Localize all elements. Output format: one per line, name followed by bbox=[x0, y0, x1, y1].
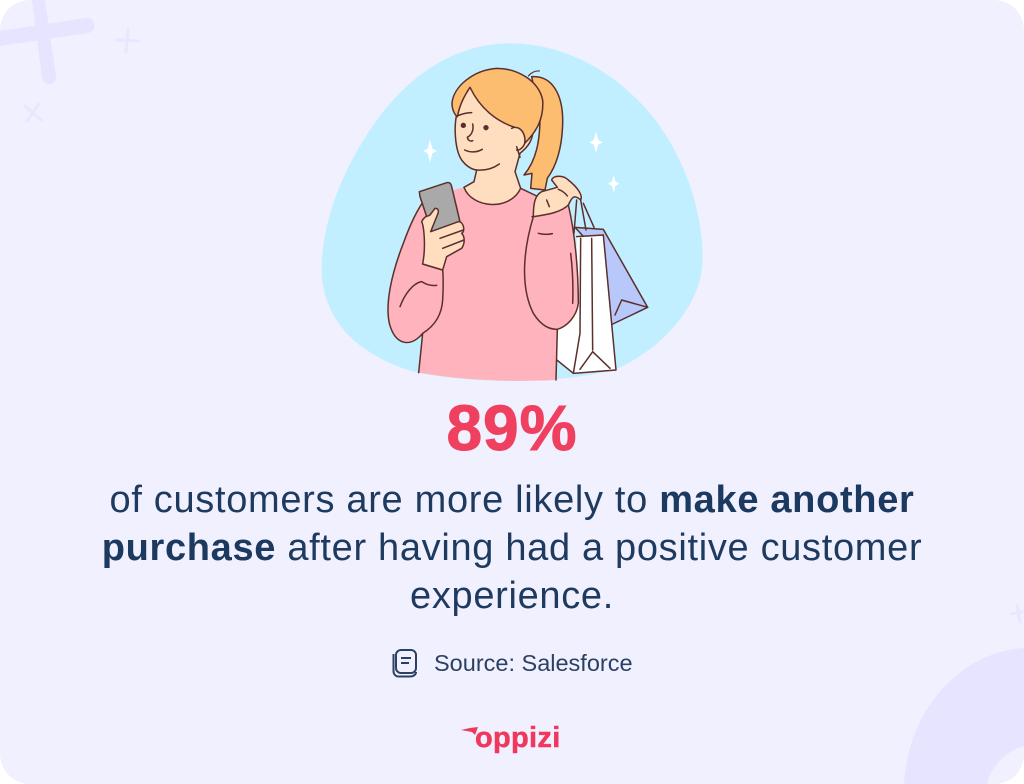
headline statistic: 89% bbox=[446, 392, 578, 464]
description text: experience. bbox=[410, 575, 614, 617]
ear and earring bbox=[512, 127, 526, 150]
white shopping bag bbox=[551, 200, 616, 373]
neck and face bbox=[455, 87, 533, 217]
description text: purchase after having had a positive customer bbox=[102, 527, 922, 569]
right hand holding bag bbox=[533, 176, 581, 217]
sweater outlines bbox=[388, 187, 578, 380]
phone bbox=[419, 182, 460, 237]
source label: Source: Salesforce bbox=[434, 650, 633, 676]
blue blob backdrop bbox=[322, 43, 703, 381]
description text bbox=[102, 479, 922, 617]
description text: of customers are more likely to make another bbox=[110, 479, 914, 521]
blue shopping bag bbox=[575, 227, 648, 325]
face details bbox=[457, 113, 520, 170]
sweater fill bbox=[388, 187, 578, 381]
hair bbox=[452, 68, 543, 143]
source icon bbox=[392, 649, 417, 678]
ponytail bbox=[524, 77, 563, 190]
logo: oppizi: oppizi bbox=[475, 722, 561, 754]
sparkles bbox=[423, 132, 619, 192]
left hand on phone bbox=[422, 208, 464, 270]
